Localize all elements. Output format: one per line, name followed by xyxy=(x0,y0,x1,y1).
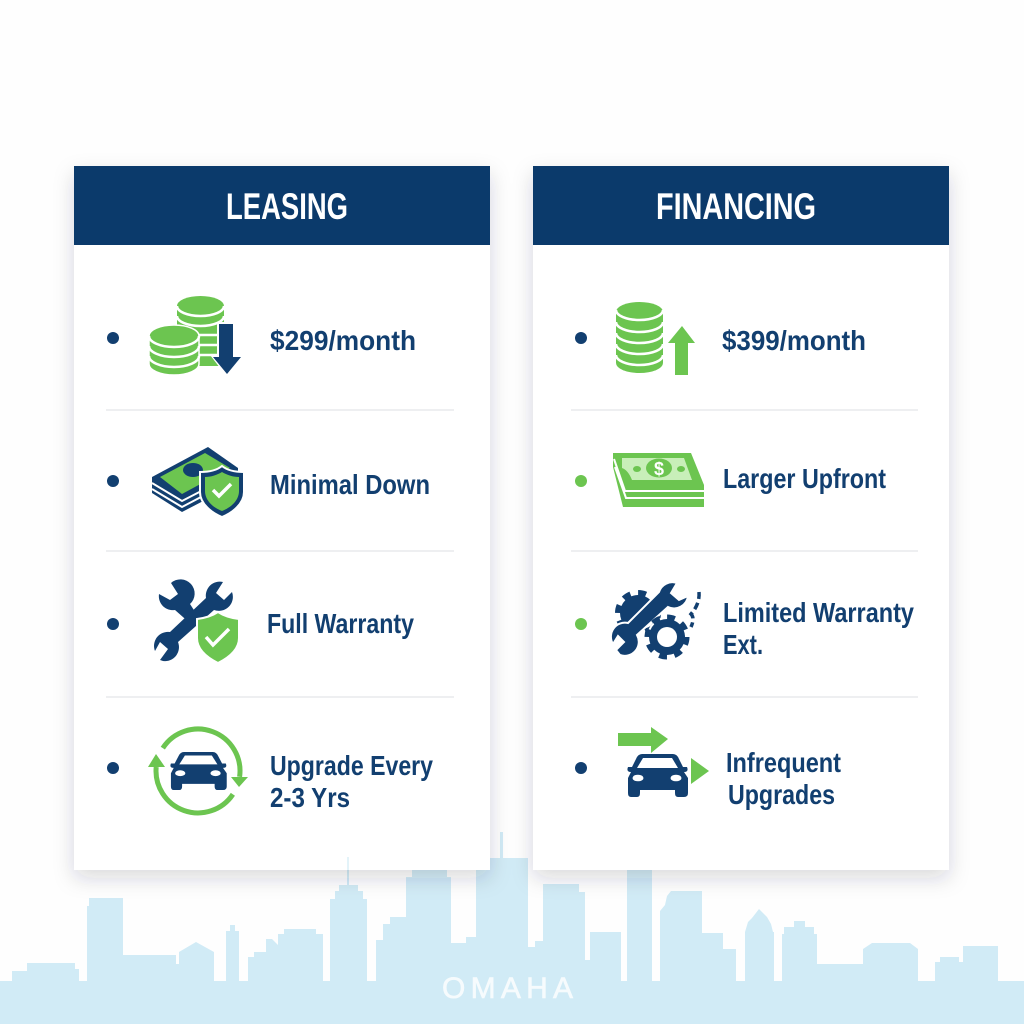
icon: wrenches with shield xyxy=(154,579,239,663)
icon: gears and wrench xyxy=(611,582,699,657)
benefit text: Upgrades xyxy=(728,779,835,810)
icon: stack of cash: $ xyxy=(654,459,664,479)
price text: $299/month xyxy=(270,325,416,356)
bullet xyxy=(107,618,119,630)
icon: car with cycle arrows xyxy=(148,729,248,813)
bullet xyxy=(575,332,587,344)
bullet xyxy=(107,475,119,487)
benefit text xyxy=(723,597,915,660)
benefit text: Minimal Down xyxy=(270,469,430,500)
panel: financing xyxy=(533,166,949,870)
financing header: FINANCING xyxy=(656,186,816,227)
icon: coins with up arrow xyxy=(616,302,695,375)
benefit text xyxy=(270,750,434,813)
benefit text: Limited Warranty xyxy=(723,597,915,628)
benefit text: Upgrade Every xyxy=(270,750,434,781)
bullet xyxy=(107,762,119,774)
icon: cash with shield xyxy=(152,447,244,517)
icon: stack of cash xyxy=(613,453,704,507)
leasing header xyxy=(74,166,490,245)
Omaha skyline xyxy=(0,832,1024,1024)
price text: $399/month xyxy=(722,325,866,356)
bullet xyxy=(575,475,587,487)
icon: coins with down arrow xyxy=(149,296,244,377)
bullet xyxy=(575,618,587,630)
benefit text: Larger Upfront xyxy=(723,463,886,494)
panel: leasing xyxy=(74,166,490,870)
benefit text: Infrequent xyxy=(726,747,841,778)
benefit text: Ext. xyxy=(723,629,763,660)
bullet xyxy=(575,762,587,774)
benefit text xyxy=(726,747,841,810)
financing header xyxy=(533,166,949,245)
bullet xyxy=(107,332,119,344)
benefit text: Full Warranty xyxy=(267,608,415,639)
benefit text: 2-3 Yrs xyxy=(270,782,350,813)
leasing header: LEASING xyxy=(226,186,348,227)
icon: car with arrows xyxy=(618,727,709,797)
city label: OMAHA xyxy=(442,972,573,1005)
